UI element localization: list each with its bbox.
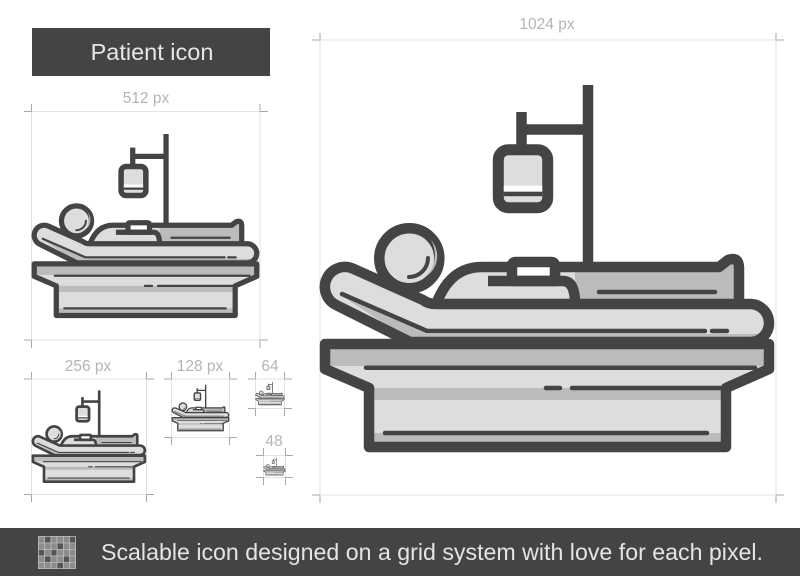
icon: patient large (325, 85, 769, 447)
icon: patient 48 (264, 458, 285, 475)
footer bar (0, 528, 800, 576)
label: 512 px: 512 px (123, 90, 170, 107)
footer text: Scalable icon designed on a grid system with love for each pixel. (101, 539, 763, 565)
title banner (32, 28, 270, 76)
panel: 64 px icon (248, 358, 292, 416)
label: 48: 48 (265, 433, 283, 450)
icon: patient 128 (172, 385, 229, 431)
icon: pixel grid (38, 536, 76, 569)
panel: 256 px icon (24, 358, 154, 502)
label: 128 px: 128 px (177, 358, 224, 375)
label: 64: 64 (261, 358, 279, 375)
panel: 128 px icon (164, 358, 237, 445)
icon: patient 512 (34, 134, 257, 315)
title banner: Patient icon (91, 39, 213, 65)
icon: patient 256 (33, 390, 145, 482)
panel: 48 px icon (256, 433, 293, 485)
label: 1024 px: 1024 px (519, 16, 575, 33)
panel: 512 px icon (24, 90, 268, 348)
icon: patient 64 (256, 382, 284, 405)
label: 256 px: 256 px (65, 358, 112, 375)
